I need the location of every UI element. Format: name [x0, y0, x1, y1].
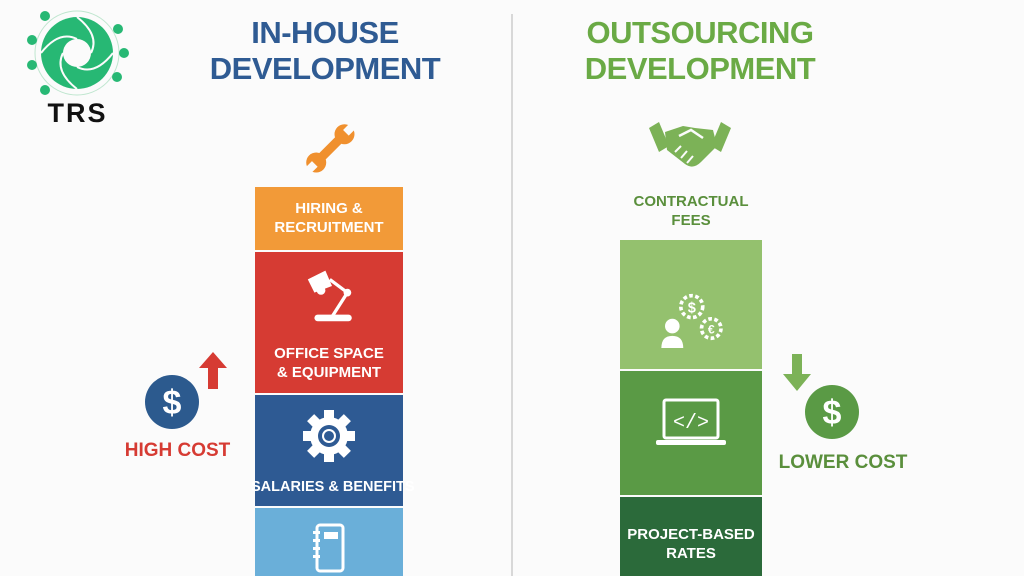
stack: outsourcing costs [620, 240, 762, 576]
block: development [620, 371, 762, 495]
high cost indicator [125, 352, 230, 461]
title: in-house: IN-HOUSE [251, 15, 399, 50]
block: development: </> [673, 412, 709, 435]
label: contractual fees: FEES [671, 212, 711, 229]
high cost indicator: $ [163, 384, 182, 422]
icon: wrench [306, 124, 354, 172]
lower cost indicator [779, 354, 908, 473]
block: team [620, 240, 762, 369]
title: outsourcing [585, 15, 816, 86]
block: office space: OFFICE SPACE [274, 345, 384, 362]
block: salaries [255, 395, 403, 506]
block: team: $ [688, 301, 696, 317]
title: in-house [210, 15, 440, 86]
block: hiring: HIRING & [295, 200, 363, 217]
title: in-house: DEVELOPMENT [210, 51, 440, 86]
icon: handshake [649, 122, 731, 167]
block: team: € [708, 322, 715, 336]
block: hiring [255, 187, 403, 250]
title: outsourcing: OUTSOURCING [586, 15, 814, 50]
title: outsourcing: DEVELOPMENT [585, 51, 815, 86]
high cost indicator: HIGH COST [125, 440, 230, 461]
block: project-based rates: RATES [666, 545, 716, 562]
block: salaries: SALARIES & BENEFITS [251, 479, 415, 495]
logo: TRS [48, 98, 108, 128]
block: office space [255, 252, 403, 393]
lower cost indicator: $ [823, 394, 842, 432]
stack: in-house costs [251, 187, 415, 576]
label: contractual fees [634, 193, 748, 229]
label: contractual fees: CONTRACTUAL [634, 193, 748, 210]
block: project-based rates [620, 497, 762, 576]
lower cost indicator: LOWER COST [779, 452, 907, 473]
logo [27, 10, 129, 128]
block: tools [255, 508, 403, 576]
block: project-based rates: PROJECT-BASED [627, 526, 755, 543]
block: hiring: RECRUITMENT [274, 219, 384, 236]
block: office space: & EQUIPMENT [277, 364, 381, 381]
